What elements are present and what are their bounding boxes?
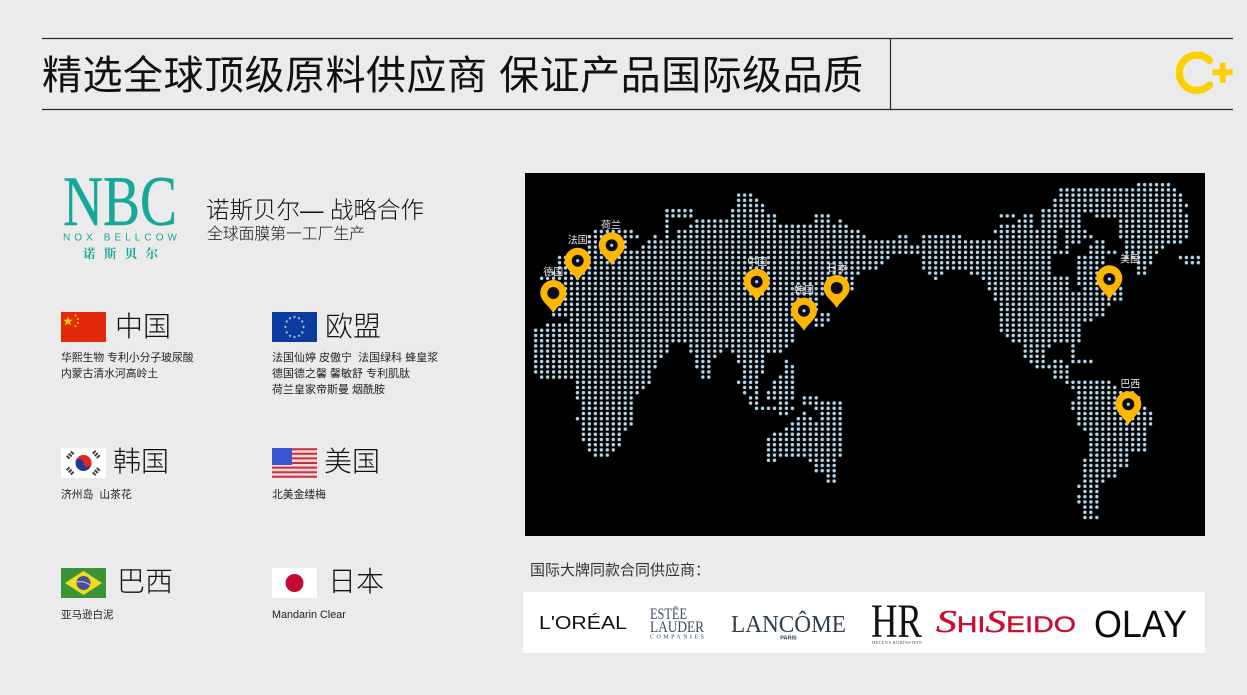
- pin: Korea: 韩国: [794, 284, 814, 296]
- text: Japan suppliers: Mandarin Clear: [272, 609, 346, 621]
- text: Brazil suppliers: 亚马逊白泥: [61, 609, 114, 621]
- logo: Estee Lauder: ESTĒE: [650, 606, 687, 623]
- heading: Japan: 日本: [328, 566, 384, 597]
- panel: Korea: [61, 446, 169, 501]
- panel: EU: [272, 311, 438, 396]
- heading: USA: 美国: [324, 446, 380, 477]
- flag: EU: [272, 312, 317, 342]
- pin: Korea: [791, 284, 817, 331]
- flag: Japan: [272, 568, 317, 598]
- logo: Estee Lauder: [650, 606, 705, 640]
- title: 精选全球顶级原料供应商 保证产品国际级品质: [42, 54, 864, 98]
- pin: France: [565, 234, 591, 281]
- flag: China: [61, 312, 106, 342]
- logo: Lancome: PARIS: [780, 636, 797, 642]
- panel: USA: [272, 446, 380, 501]
- pin: Brazil: [1115, 378, 1141, 425]
- strategic partner subheading: 全球面膜第一工厂生产: [207, 226, 365, 243]
- pin: China: [744, 256, 770, 301]
- text: China suppliers: 华熙生物 专利小分子玻尿酸: [61, 352, 194, 364]
- text: EU suppliers: 荷兰皇家帝斯曼 烟酰胺: [272, 384, 385, 396]
- NBC logo: NOX BELLCOW: [63, 232, 178, 244]
- pin: USA: 美国: [1120, 252, 1140, 266]
- pin: Brazil: 巴西: [1120, 378, 1140, 390]
- world map panel: [525, 173, 1205, 536]
- pin: Japan: 日本: [827, 262, 847, 274]
- panel: Japan: [272, 566, 384, 621]
- pin: USA: [1096, 252, 1140, 300]
- flag: Korea: [61, 448, 106, 478]
- text: EU suppliers: 法国仙婷 皮傲宁 法国绿科 蜂皇浆: [272, 352, 438, 364]
- text: China suppliers: [61, 352, 194, 380]
- text: USA suppliers: 北美金缕梅: [272, 489, 326, 501]
- logo: Olay: OLAY: [1094, 604, 1187, 646]
- pin: Netherlands: 荷兰: [601, 218, 621, 232]
- NBC logo: 诺斯贝尔: [83, 244, 159, 262]
- text: Korea suppliers: 济州岛 山茶花: [61, 489, 132, 501]
- logo: Helena Rubinstein: HR: [871, 595, 922, 648]
- logo: L'Oreal: L'ORÉAL: [539, 613, 627, 633]
- pin: Germany: [540, 266, 566, 313]
- pin: Netherlands: [599, 218, 625, 265]
- logo: Estee Lauder: COMPANIES: [650, 634, 704, 640]
- dotted world map: [533, 182, 1201, 520]
- text: EU suppliers: [272, 352, 438, 396]
- brands caption: 国际大牌同款合同供应商：: [530, 562, 710, 579]
- logo: Shiseido: SHISEIDO: [936, 603, 1076, 639]
- text: EU suppliers: 德国德之馨 馨敏舒 专利肌肽: [272, 368, 410, 380]
- icon: C+ logo: [1176, 52, 1233, 94]
- heading: Korea: 韩国: [113, 446, 169, 477]
- pin: Japan: [824, 262, 850, 308]
- header rules and title divider: [42, 38, 1233, 110]
- pin: France: 法国: [568, 234, 588, 246]
- flag: USA: [272, 448, 317, 478]
- strategic partner heading: 诺斯贝尔— 战略合作: [206, 197, 424, 223]
- pin: China: 中国: [747, 256, 767, 268]
- heading: EU: 欧盟: [325, 311, 381, 342]
- panel: China: [61, 311, 194, 380]
- flag: Brazil: [61, 568, 106, 598]
- logo: Estee Lauder: LAUDER: [650, 619, 705, 636]
- panel: Brazil: [61, 566, 173, 621]
- heading: Brazil: 巴西: [117, 566, 173, 597]
- text: China suppliers: 内蒙古清水河高岭土: [61, 368, 158, 380]
- panel: brand logos: [523, 592, 1205, 653]
- logo: Helena Rubinstein: HELENA RUBINSTEIN: [872, 640, 923, 645]
- logo: Lancome: LANCÔME: [731, 611, 846, 638]
- pin: Germany: 德国: [543, 266, 563, 278]
- heading: China: 中国: [115, 311, 171, 342]
